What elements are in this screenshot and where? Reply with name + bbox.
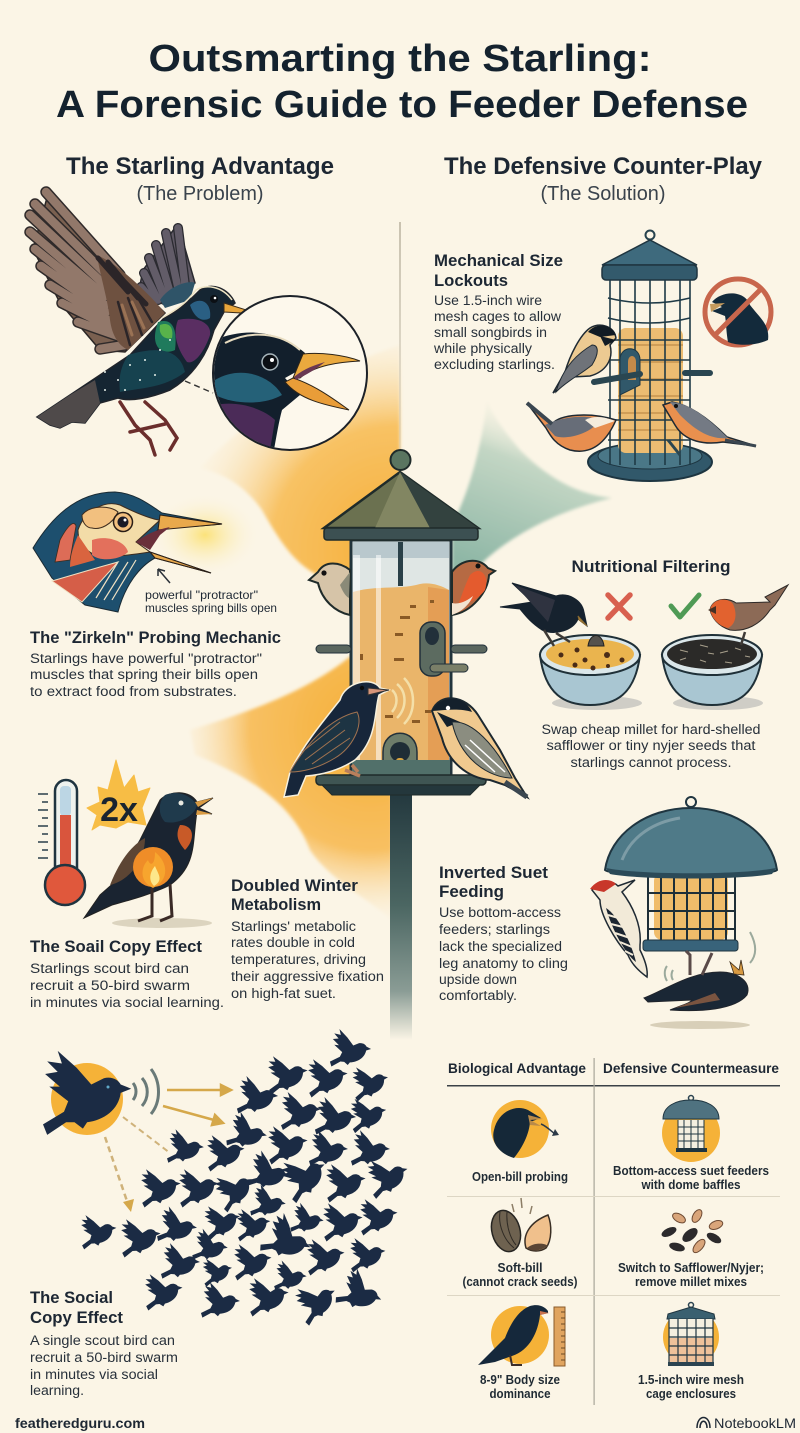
text block: doubled winter metabolism: on high-fat suet.: [231, 986, 336, 1001]
text block: inverted suet feeding: upside down: [439, 972, 517, 987]
illustration: inverted suet feeder: [590, 797, 777, 1029]
near wing: [30, 192, 165, 352]
label: bottom-access suet feeders: Bottom-access suet feeders: [613, 1163, 769, 1178]
bowl: millet: [540, 635, 642, 710]
text block: inverted suet feeding: Use bottom-access: [439, 905, 561, 920]
text block: inverted suet feeding: leg anatomy to cling: [439, 956, 568, 971]
title: A Forensic Guide to Feeder Defense: [56, 84, 748, 126]
illustration: flying starling with bill inset: [30, 192, 367, 460]
illustration: caged tube feeder with songbirds: [527, 230, 771, 481]
text block: zirkeln probing mechanic: muscles that spring their bills open: [30, 667, 258, 682]
label: body size dominance: [480, 1372, 560, 1401]
table header: Defensive Countermeasure: [603, 1060, 779, 1076]
text block: the soail copy effect: in minutes via social learning.: [30, 995, 224, 1010]
text block: inverted suet feeding: [439, 863, 568, 1003]
bird: starling at bowl: [500, 583, 587, 646]
text block: the soail copy effect: recruit a 50-bird swarm: [30, 978, 190, 993]
illustration: starling swarm: [80, 1028, 413, 1326]
text block: inverted suet feeding: Inverted Suet: [439, 863, 548, 882]
body: [37, 286, 235, 428]
text block: swap millet: Swap cheap millet for hard-shelled: [542, 722, 760, 737]
comparison table: [447, 1058, 780, 1405]
orange flow: problem side upper: [200, 345, 400, 590]
text block: mechanical size lockouts: small songbirds in: [434, 325, 547, 340]
text block: zirkeln probing mechanic: to extract food from substrates.: [30, 684, 237, 699]
feeder roof: [324, 472, 478, 528]
icon: no starlings sign: [705, 279, 771, 345]
text block: nutritional filtering heading: Nutritional Filtering: [572, 557, 730, 576]
tray: [352, 760, 450, 775]
text block: doubled winter metabolism: Metabolism: [231, 895, 321, 914]
text block: swap millet: starlings cannot process.: [570, 755, 732, 770]
text block: doubled winter metabolism: their aggressive fixation: [231, 969, 384, 984]
text block: the soail copy effect: [30, 937, 224, 1010]
text block: the social copy effect: recruit a 50-bird swarm: [30, 1350, 178, 1365]
label: switch to safflower: Switch to Safflower/Nyjer;: [618, 1260, 764, 1275]
text block: inverted suet feeding: comfortably.: [439, 988, 517, 1003]
icon: open-bill probing: [491, 1100, 559, 1158]
label: wire mesh cage enclosures: cage enclosures: [646, 1386, 736, 1401]
title: Outsmarting the Starling:: [148, 38, 652, 80]
heading: the starling advantage: The Starling Advantage: [66, 153, 334, 180]
bird: chickadee: [432, 698, 527, 797]
text block: zirkeln probing mechanic: [30, 628, 281, 699]
text block: zirkeln probing mechanic: Starlings have powerful "protractor": [30, 651, 262, 666]
icon: body size with ruler: [478, 1305, 565, 1366]
icon: safflower and nyjer seeds: [660, 1208, 724, 1255]
text block: inverted suet feeding: Feeding: [439, 882, 504, 901]
label: soft-bill: (cannot crack seeds): [462, 1274, 578, 1289]
text block: zirkeln probing mechanic: The "Zirkeln" Probing Mechanic: [30, 628, 281, 647]
text block: the soail copy effect: Starlings scout bird can: [30, 961, 189, 976]
text block: mechanical size lockouts: while physically: [433, 341, 532, 356]
text block: inverted suet feeding: feeders; starlings: [439, 922, 550, 937]
label: body size dominance: dominance: [490, 1386, 550, 1401]
text block: the social copy effect: A single scout bird can: [30, 1333, 175, 1348]
callout: protractor muscles: muscles spring bills open: [145, 601, 277, 615]
green flow: solution side: [452, 400, 612, 580]
illustration: central feeder: [284, 450, 527, 1040]
text block: the social copy effect: The Social: [30, 1288, 113, 1307]
label: body size dominance: 8-9" Body size: [480, 1372, 560, 1387]
bird: nuthatch left: [527, 403, 616, 451]
table header: Biological Advantage: [448, 1060, 586, 1076]
icon: suet feeder with dome: [662, 1096, 720, 1162]
icon: wire mesh cage: [663, 1302, 719, 1366]
illustration: scout bird broadcasting: [43, 1051, 158, 1135]
text block: swap millet: safflower or tiny nyjer seeds that: [546, 738, 756, 753]
text block: the social copy effect: learning.: [30, 1383, 84, 1398]
pole: [390, 795, 412, 1040]
bird: robin: [452, 561, 495, 615]
text block: the social copy effect: in minutes via social: [30, 1367, 158, 1382]
label: open-bill probing: Open-bill probing: [472, 1169, 568, 1184]
label: bottom-access suet feeders: [613, 1163, 769, 1192]
text block: doubled winter metabolism: Doubled Winter: [231, 876, 358, 895]
footer: notebooklm mark: NotebookLM: [714, 1415, 796, 1431]
callout: protractor muscles: [145, 588, 277, 615]
table header: [448, 1060, 779, 1076]
center divider: [399, 222, 401, 452]
text block: mechanical size lockouts: [433, 251, 563, 372]
text block: the social copy effect: [30, 1288, 178, 1398]
heading: the defensive counter-play: The Defensive Counter-Play: [444, 153, 763, 180]
perches and ports: [316, 645, 351, 653]
arrows: recruitment: [105, 1085, 231, 1212]
icon: cracked seeds: [487, 1198, 551, 1255]
text block: mechanical size lockouts: Mechanical Size: [434, 251, 563, 270]
label: bottom-access suet feeders: with dome baffles: [641, 1177, 740, 1192]
label: soft-bill: [462, 1260, 578, 1289]
text block: inverted suet feeding: lack the specialized: [439, 939, 562, 954]
text block: doubled winter metabolism: temperatures, driving: [231, 952, 366, 967]
beak: [224, 303, 259, 314]
text block: mechanical size lockouts: Lockouts: [434, 271, 508, 290]
footer: site name: featheredguru.com: [15, 1415, 145, 1431]
bird: starling at feeder: [284, 682, 389, 797]
icon: 2x flame: 2x: [100, 791, 138, 829]
bird: chickadee on perch: [553, 325, 616, 393]
label: switch to safflower: [618, 1260, 764, 1289]
far wing: [140, 224, 195, 308]
text block: mechanical size lockouts: Use 1.5-inch wire: [434, 293, 542, 308]
label: soft-bill: Soft-bill: [498, 1260, 542, 1275]
heading: the defensive counter-play: [444, 153, 763, 205]
illustration: thermometer: [38, 780, 85, 905]
text block: mechanical size lockouts: mesh cages to allow: [434, 309, 561, 324]
text block: mechanical size lockouts: excluding starlings.: [434, 357, 555, 372]
label: switch to safflower: remove millet mixes: [635, 1274, 747, 1289]
label: wire mesh cage enclosures: 1.5-inch wire mesh: [638, 1372, 744, 1387]
heading: the starling advantage: (The Problem): [136, 183, 264, 205]
icon: 2x flame: [87, 760, 150, 830]
heading: the defensive counter-play: (The Solution): [540, 183, 666, 205]
text block: doubled winter metabolism: [231, 876, 384, 1001]
illustration: seed bowls: [500, 583, 788, 710]
heading: the starling advantage: [66, 153, 334, 205]
callout: protractor muscles: powerful "protractor": [145, 588, 258, 602]
bird: robin at bowl: [708, 585, 788, 645]
title: [56, 38, 748, 126]
seed tube: [351, 540, 451, 775]
dashed connector: [185, 381, 213, 393]
orange flow: problem side lower: [190, 655, 392, 920]
text block: swap millet: [542, 722, 760, 770]
bill inset circle: [205, 296, 367, 460]
text block: doubled winter metabolism: Starlings' metabolic: [231, 919, 356, 934]
bird: sparrow: [309, 564, 350, 615]
illustration: starling with metabolic fire: [84, 793, 213, 928]
illustration: zirkeln skull and muscles: [33, 492, 260, 612]
sound arcs: [392, 678, 413, 724]
icon: red x: [608, 595, 630, 618]
text block: the social copy effect: Copy Effect: [30, 1308, 123, 1327]
bird: nuthatch right: [663, 402, 756, 455]
icon: green check: [671, 595, 699, 617]
text block: doubled winter metabolism: rates double in cold: [231, 935, 355, 950]
bowl: nyjer: [662, 635, 763, 710]
text block: the soail copy effect: The Soail Copy Effect: [30, 937, 202, 956]
bird: woodpecker: [590, 880, 647, 977]
label: wire mesh cage enclosures: [638, 1372, 744, 1401]
bird: upside-down starling: [644, 932, 755, 1029]
